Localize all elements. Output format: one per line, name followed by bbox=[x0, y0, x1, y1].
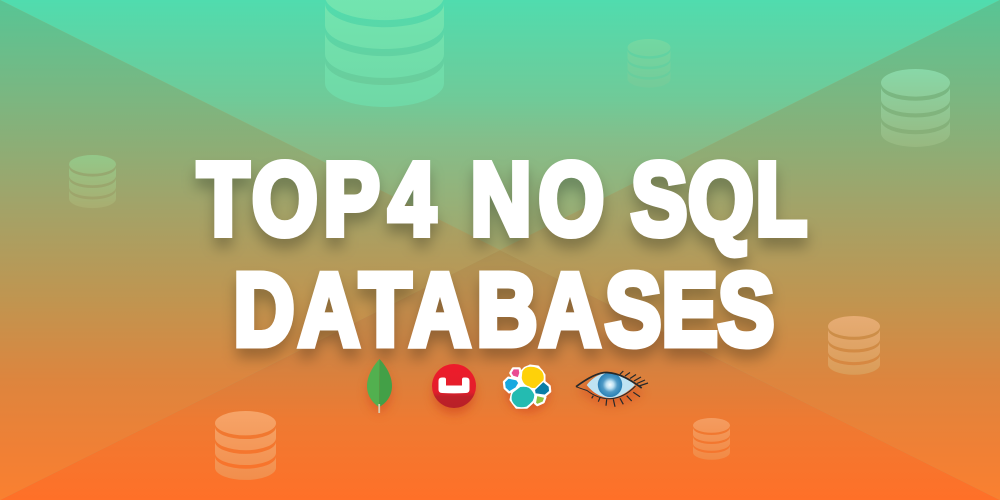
title shadow: DATABASES bbox=[234, 262, 774, 377]
icon: database lower right bbox=[828, 316, 880, 375]
background: right panel bbox=[500, 0, 1000, 500]
icon: database lower left bbox=[215, 411, 276, 480]
title bbox=[198, 142, 807, 377]
icon: Couchbase bbox=[432, 364, 476, 414]
icon: database right bbox=[881, 69, 950, 147]
white backing bbox=[504, 366, 550, 407]
icon: Elasticsearch bbox=[504, 366, 550, 412]
title line 1: TOP4 NO SQL bbox=[198, 142, 807, 256]
icon: database left bbox=[69, 155, 116, 208]
icon: Cassandra eye bbox=[576, 371, 648, 407]
icon: database bottom centre right bbox=[693, 418, 730, 460]
title line 2: DATABASES bbox=[234, 252, 774, 367]
icon: small database top right bbox=[628, 39, 670, 88]
background: left panel bbox=[0, 0, 500, 500]
title shadow bbox=[198, 152, 807, 377]
icon: MongoDB leaf bbox=[367, 359, 392, 413]
background: bottom panel bbox=[0, 250, 1000, 500]
background: top panel bbox=[0, 0, 1000, 250]
icon: large database top bbox=[325, 0, 444, 107]
title shadow: TOP4 NO SQL bbox=[198, 152, 807, 266]
